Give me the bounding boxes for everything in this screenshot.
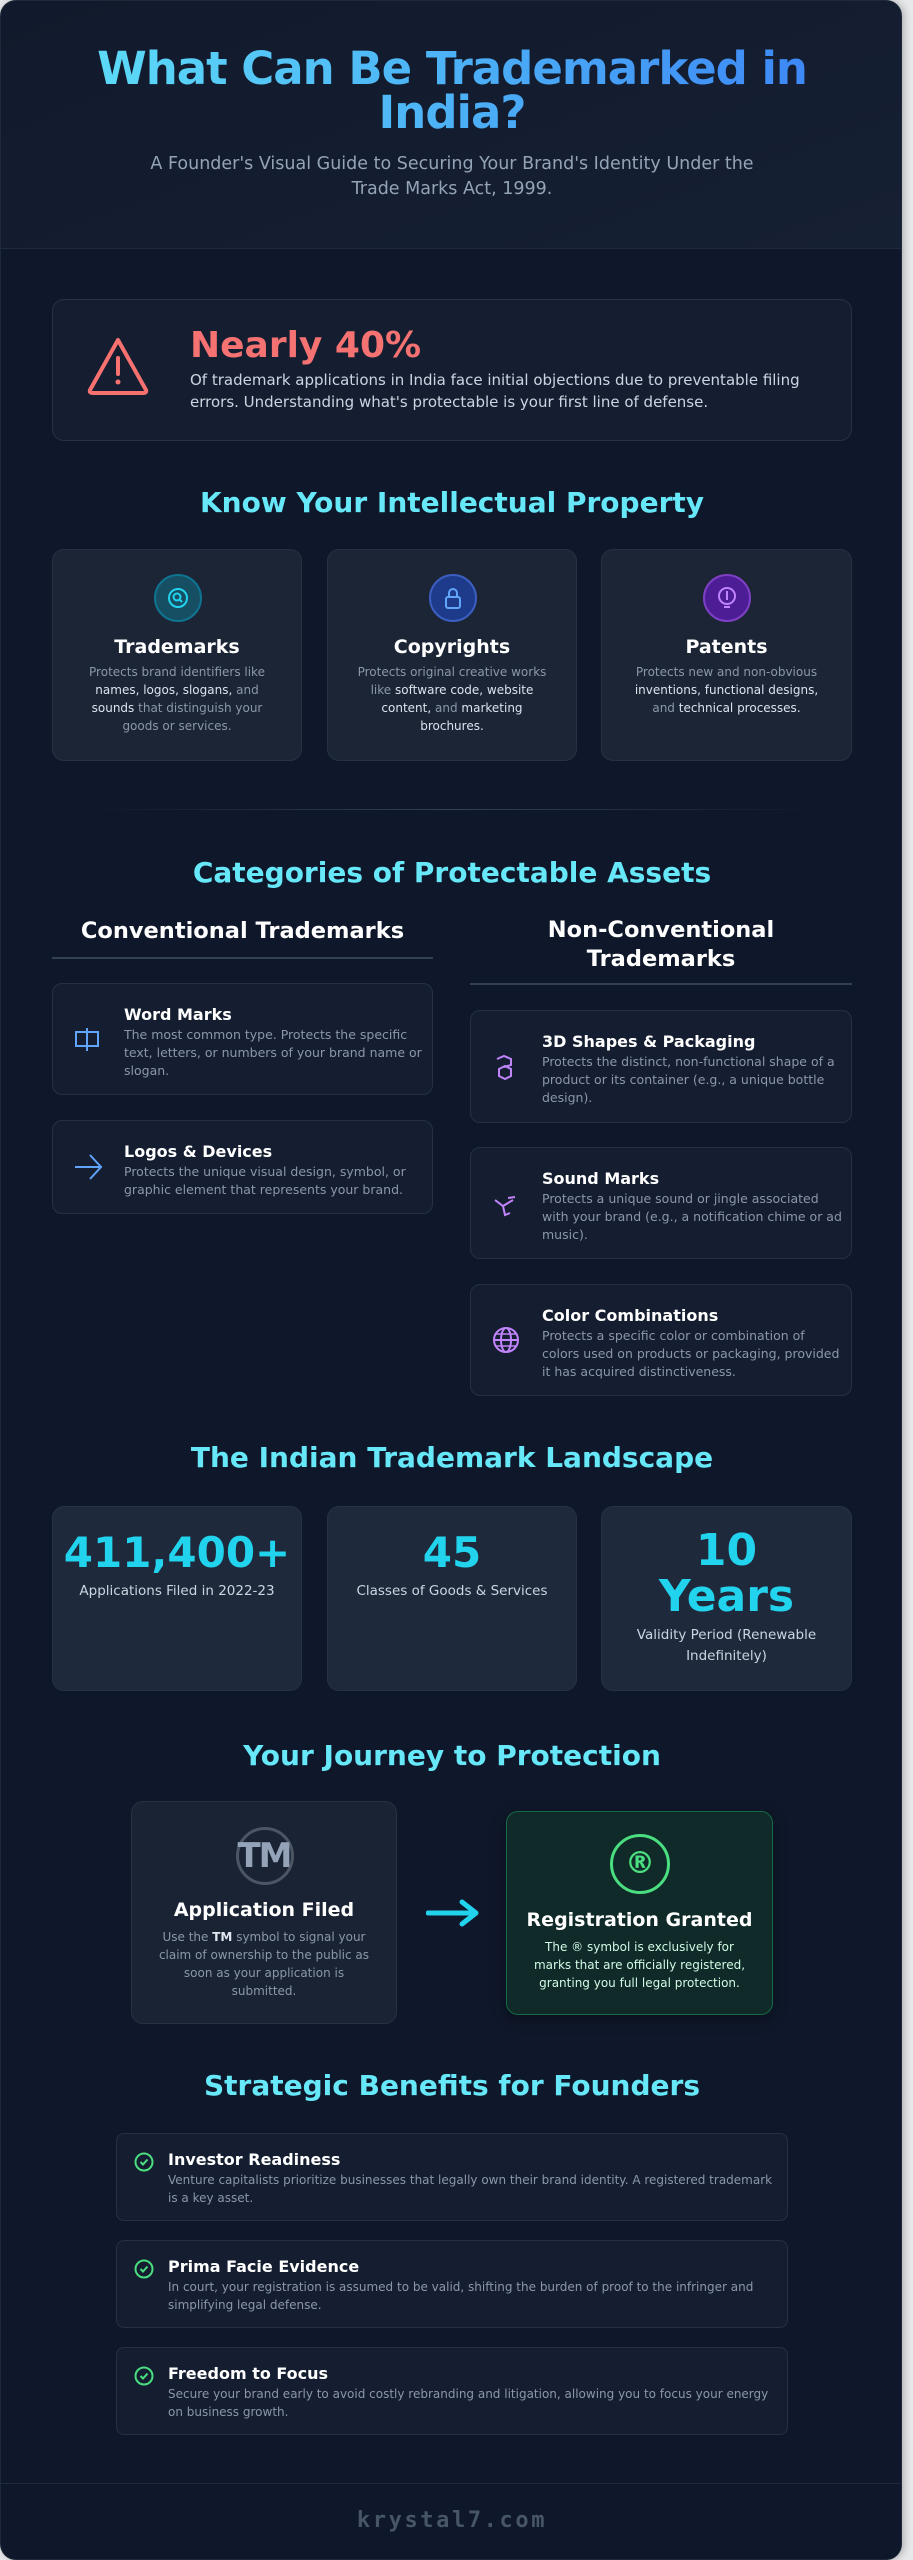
- card: color combinations: Color Combinations: [542, 1306, 718, 1325]
- benefit: freedom to focus: [116, 2347, 788, 2435]
- step: application filed: Use the TM symbol to signal your claim of ownership to the public as soon as your application is submitted.: [159, 1930, 369, 1998]
- card: logos: Protects the unique visual design, symbol, or graphic element that represents your brand.: [124, 1164, 406, 1197]
- panel: trademarks: [52, 549, 302, 761]
- benefit: freedom to focus: Secure your brand early to avoid costly rebranding and litigation, allowing you to focus your energy on business growth.: [168, 2387, 768, 2419]
- stat: applications: [52, 1506, 302, 1691]
- column heading: non-conventional: Non-Conventional Trademarks: [548, 917, 774, 972]
- panel: patents: Protects new and non-obvious inventions, functional designs, and technical processes.: [635, 665, 818, 715]
- footer: krystal7.com: [357, 2508, 547, 2533]
- icon: sound: [494, 1196, 516, 1216]
- step: registration granted: The ® symbol is exclusively for marks that are officially registered, granting you full legal protection.: [534, 1940, 745, 1990]
- stat: applications: 411,400+: [64, 1528, 290, 1577]
- card: color combinations: [470, 1284, 852, 1396]
- panel: trademarks: Trademarks: [114, 636, 240, 658]
- arrow: [426, 1900, 478, 1926]
- card: word marks: [52, 983, 433, 1095]
- step: registration granted: Registration Granted: [527, 1909, 752, 1931]
- panel: trademarks: Protects brand identifiers like names, logos, slogans, and sounds that distinguish your goods or services.: [89, 665, 265, 733]
- benefit: prima facie: Prima Facie Evidence: [168, 2257, 359, 2276]
- stat: validity: [601, 1506, 852, 1691]
- card: sound marks: Sound Marks: [542, 1169, 659, 1188]
- column heading: conventional: Conventional Trademarks: [81, 918, 404, 944]
- icon: registered: ®: [625, 1846, 655, 1881]
- icon: word mark: [75, 1028, 99, 1051]
- card: logos: [52, 1120, 433, 1214]
- footer: [1, 2483, 903, 2560]
- icon: TM: [236, 1827, 294, 1885]
- stat headline: Nearly 40%: [190, 325, 421, 366]
- panel: copyrights: Protects original creative works like software code, website content, and marketing brochures.: [358, 665, 546, 733]
- panel: patents: [601, 549, 852, 761]
- title: What Can Be Trademarked in India?: [97, 42, 807, 139]
- card: sound marks: Protects a unique sound or jingle associated with your brand (e.g., a notification chime or ad music).: [542, 1191, 842, 1242]
- icon: search: [154, 574, 202, 622]
- icon: warning triangle: [88, 338, 148, 395]
- benefit: freedom to focus: Freedom to Focus: [168, 2364, 328, 2383]
- icon: arrow: [75, 1154, 102, 1180]
- step: registration granted: [506, 1811, 773, 2015]
- card: 3d shapes: 3D Shapes & Packaging: [542, 1032, 755, 1051]
- heading: know your IP: Know Your Intellectual Property: [200, 486, 704, 519]
- subtitle: A Founder's Visual Guide to Securing Your Brand's Identity Under the Trade Marks Act, 1999.: [150, 154, 754, 199]
- card: color combinations: Protects a specific color or combination of colors used on products or packaging, provided it has acquired distinctiveness.: [542, 1328, 839, 1379]
- stat: validity: Validity Period (Renewable Indefinitely): [637, 1627, 816, 1664]
- icon: cubes: [496, 1054, 512, 1080]
- alert callout: [52, 299, 852, 441]
- benefit: prima facie: In court, your registration is assumed to be valid, shifting the burden of proof to the infringer and simplifying legal defense.: [168, 2280, 753, 2312]
- icon: bulb: [703, 574, 751, 622]
- benefit: investor readiness: Investor Readiness: [168, 2150, 340, 2169]
- stat: validity: Years: [659, 1571, 794, 1622]
- icon: globe: [493, 1327, 519, 1353]
- step: application filed: [131, 1801, 397, 2024]
- stat: classes: 45: [423, 1528, 481, 1577]
- benefit: investor readiness: [116, 2133, 788, 2221]
- alert text: Of trademark applications in India face initial objections due to preventable filing errors. Understanding what's protectable is your first line of defense.: [190, 371, 800, 411]
- panel: copyrights: Copyrights: [394, 636, 510, 658]
- heading: benefits: Strategic Benefits for Founders: [204, 2069, 700, 2102]
- panel: copyrights: [327, 549, 577, 761]
- stat: validity: 10: [696, 1525, 757, 1576]
- step: application filed: Application Filed: [174, 1899, 354, 1921]
- heading: journey: Your Journey to Protection: [243, 1739, 661, 1772]
- heading: landscape: The Indian Trademark Landscape: [191, 1441, 713, 1474]
- stat: applications: Applications Filed in 2022-23: [79, 1583, 275, 1599]
- card: 3d shapes: [470, 1010, 852, 1123]
- card: word marks: Word Marks: [124, 1005, 232, 1024]
- card: sound marks: [470, 1147, 852, 1259]
- card: logos: Logos & Devices: [124, 1142, 272, 1161]
- card: 3d shapes: Protects the distinct, non-functional shape of a product or its container (e.g., a unique bottle design).: [542, 1054, 835, 1105]
- header: [1, 1, 903, 249]
- stat: classes: Classes of Goods & Services: [356, 1583, 548, 1599]
- card: word marks: The most common type. Protects the specific text, letters, or numbers of your brand name or slogan.: [124, 1027, 422, 1078]
- benefit: investor readiness: Venture capitalists prioritize businesses that legally own their brand identity. A registered trademark is a key asset.: [168, 2173, 772, 2205]
- panel: patents: Patents: [685, 636, 768, 658]
- heading: categories: Categories of Protectable Assets: [193, 856, 711, 889]
- stat: classes: [327, 1506, 577, 1691]
- icon: registered: [610, 1834, 670, 1894]
- benefit: prima facie: [116, 2240, 788, 2328]
- icon: TM: TM: [237, 1836, 291, 1876]
- icon: lock: [429, 574, 477, 622]
